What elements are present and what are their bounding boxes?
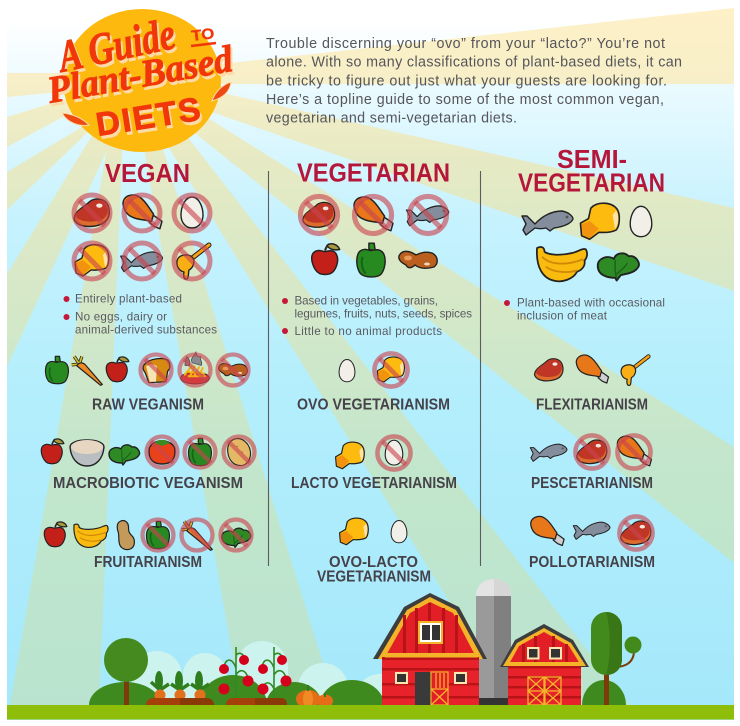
intro text — [266, 36, 682, 127]
farm scene — [7, 579, 734, 720]
diet: lacto vegetarianism — [291, 436, 457, 492]
diet: fruitarianism — [44, 520, 251, 571]
green hills — [89, 675, 626, 705]
bullets: vegan: No eggs, dairy or — [75, 310, 167, 324]
icon: beans — [399, 251, 437, 268]
diet: flexitarianism — [535, 355, 648, 414]
icon: no fish — [406, 196, 449, 234]
diet: flexitarianism: FLEXITARIANISM — [536, 396, 648, 414]
icon: banana — [537, 247, 587, 281]
diet: pollotarianism — [529, 516, 655, 571]
diet: ovo-lacto vegetarianism: OVO-LACTO — [329, 554, 418, 571]
diet: ovo vegetarianism — [297, 353, 450, 414]
diet: macrobiotic veganism: MACROBIOTIC VEGANISM — [53, 475, 243, 492]
icon: egg — [630, 206, 652, 237]
icon: no chicken — [123, 195, 162, 231]
right tree — [591, 612, 642, 705]
intro text: vegetarian and semi-vegetarian diets. — [266, 111, 517, 127]
diet: pescetarianism — [530, 435, 653, 492]
icon: no fish — [121, 243, 162, 279]
left tree — [104, 638, 148, 705]
intro text: be tricky to figure out just what your guests are looking for. — [266, 74, 667, 90]
panel: vegetarian — [282, 158, 472, 586]
bullets: vegetarian: legumes, fruits, nuts, seeds, spices — [294, 308, 472, 320]
title shadow: Plant-Based — [45, 41, 239, 115]
title words: Plant-Based — [43, 38, 237, 112]
heading: vegetarian: VEGETARIAN — [297, 158, 450, 188]
title words: TO — [190, 25, 216, 45]
icon: no meat — [300, 196, 338, 234]
bullets: semi-vegetarian: Plant-based with occasional — [517, 296, 665, 310]
icon: no honey — [174, 243, 210, 279]
icon: no egg — [174, 195, 210, 231]
bullets: vegetarian: Based in vegetables, grains, — [294, 294, 438, 308]
diet: macrobiotic veganism — [41, 437, 254, 492]
bullets: semi-vegetarian — [504, 296, 665, 322]
bullets: vegetarian — [282, 294, 472, 338]
small barn — [500, 624, 589, 705]
diet: ovo-lacto vegetarianism — [317, 518, 431, 586]
sun — [63, 9, 221, 152]
icon: fish — [522, 211, 573, 235]
ground — [7, 705, 734, 720]
diet: fruitarianism: FRUITARIANISM — [94, 554, 202, 571]
heading: semi-vegetarian: SEMI- — [557, 144, 627, 174]
heading: semi-vegetarian — [518, 144, 665, 198]
icon: no meat — [74, 195, 110, 231]
heading: semi-vegetarian: VEGETARIAN — [518, 168, 665, 198]
title shadow — [45, 11, 239, 146]
intro text: alone. With so many classifications of plant-based diets, it can — [266, 55, 682, 71]
title shadow: DIETS — [95, 93, 205, 146]
diet: ovo vegetarianism: OVO VEGETARIANISM — [297, 396, 450, 414]
diet: ovo-lacto vegetarianism: VEGETARIANISM — [317, 568, 431, 586]
pale background hills — [132, 641, 405, 705]
bullets: semi-vegetarian: inclusion of meat — [517, 310, 608, 322]
bullets: vegan: Entirely plant-based — [75, 292, 182, 306]
carrot bed — [146, 671, 214, 705]
title shadow: A Guide — [53, 11, 182, 85]
title badge: A Guide to Plant-Based Diets — [43, 8, 239, 152]
large barn — [373, 593, 487, 705]
title words: DIETS — [93, 90, 203, 143]
diet: lacto vegetarianism: LACTO VEGETARIANISM — [291, 475, 457, 492]
panel: vegan — [41, 158, 254, 571]
diet: pollotarianism: POLLOTARIANISM — [529, 554, 655, 571]
bullets: vegetarian: Little to no animal products — [294, 325, 442, 338]
tomato plants — [218, 647, 292, 705]
left leaf — [62, 113, 89, 125]
silo — [476, 579, 511, 705]
icon: apple — [312, 244, 340, 274]
pumpkins — [296, 685, 333, 708]
title words — [43, 8, 237, 143]
title words: A Guide — [51, 8, 180, 82]
intro text: Trouble discerning your “ovo” from your “lacto?” You’re not — [266, 36, 665, 52]
diet: raw veganism: RAW VEGANISM — [92, 396, 204, 414]
icon: no chicken — [354, 196, 393, 234]
icon: cheese — [580, 203, 619, 239]
bullets: vegan: animal-derived substances — [75, 324, 217, 336]
icon: no cheese — [74, 243, 110, 279]
diet: pescetarianism: PESCETARIANISM — [531, 475, 653, 492]
panel: semi-vegetarian — [504, 144, 665, 571]
diet: raw veganism — [45, 352, 248, 414]
column dividers — [268, 171, 480, 566]
icon: spinach — [598, 253, 639, 281]
right leaf — [212, 82, 231, 101]
intro text: Here’s a topline guide to some of the most common vegan, — [266, 92, 664, 108]
bullets: vegan — [64, 292, 217, 336]
icon: pepper — [357, 243, 385, 277]
heading: vegan: VEGAN — [105, 158, 190, 188]
